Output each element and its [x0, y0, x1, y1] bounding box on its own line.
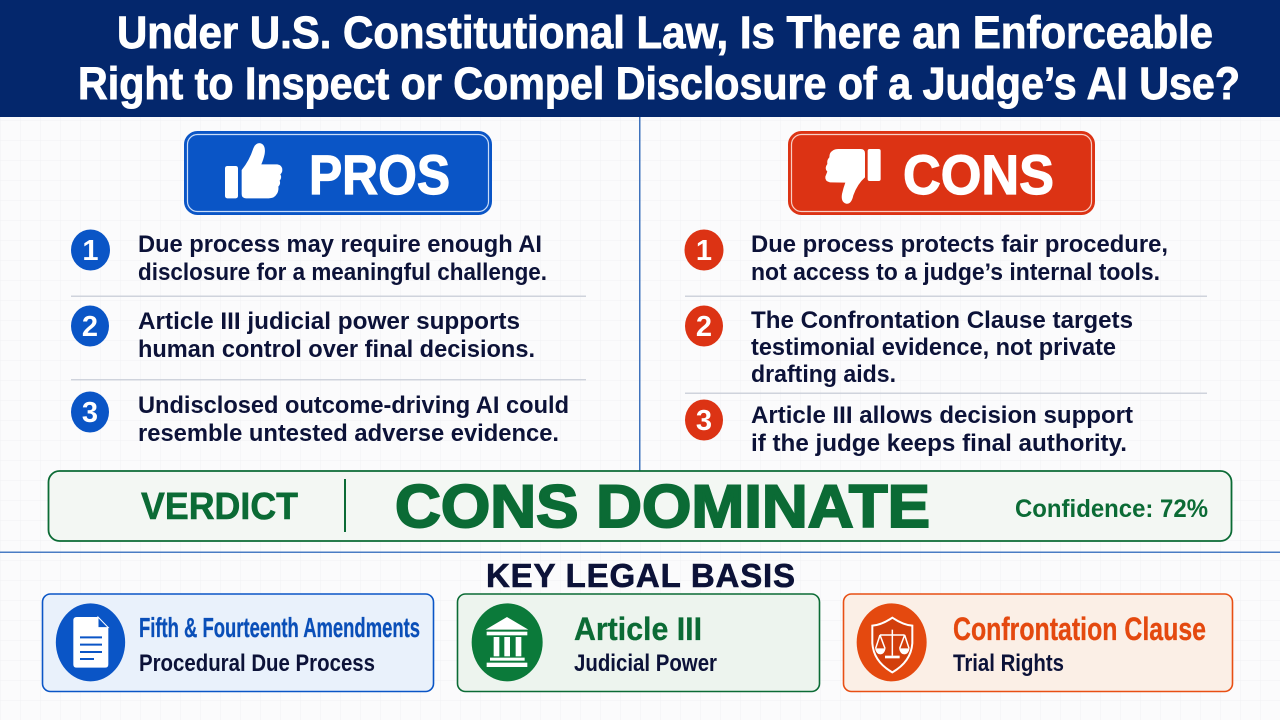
icon: thumbs down	[825, 149, 881, 204]
verdict bar: VERDICT	[141, 486, 298, 528]
pro item 3: 3	[82, 397, 98, 429]
con item 2	[685, 306, 1133, 388]
con item 1: Due process protects fair procedure,	[751, 231, 1168, 258]
con item 1: not access to a judge’s internal tools.	[751, 259, 1160, 286]
card: fifth and fourteenth amendments	[42, 594, 434, 692]
card: article iii: Article III	[574, 611, 702, 647]
pro item 2: 2	[82, 311, 98, 343]
icon: shield with scales	[857, 603, 927, 681]
card: confrontation clause: Confrontation Clause	[953, 611, 1206, 647]
pro item 1: Due process may require enough AI	[138, 231, 542, 258]
pro item 1: disclosure for a meaningful challenge.	[138, 259, 547, 286]
card: confrontation clause	[844, 594, 1232, 692]
pro item 3	[71, 392, 569, 447]
con item 2: 2	[696, 311, 712, 343]
title banner: Under U.S. Constitutional Law, Is There an Enforceable	[117, 7, 1213, 58]
pro item 2: Article III judicial power supports	[138, 308, 520, 335]
pro item 2: human control over final decisions.	[138, 336, 535, 363]
con item 2: testimonial evidence, not private	[751, 334, 1116, 361]
card: confrontation clause: Trial Rights	[953, 650, 1064, 677]
heading: key legal basis: KEY LEGAL BASIS	[486, 557, 795, 594]
cons badge: CONS	[903, 143, 1054, 206]
icon: document	[56, 603, 125, 681]
con item 1	[684, 230, 1168, 286]
panel: pros	[71, 132, 586, 447]
card: fifth and fourteenth amendments: Fifth & Fourteenth Amendments	[139, 612, 420, 643]
pros badge: PROS	[309, 143, 450, 206]
pro item 3: resemble untested adverse evidence.	[138, 420, 559, 447]
con item 3: if the judge keeps final authority.	[751, 430, 1127, 457]
verdict bar	[48, 471, 1232, 541]
panel: cons	[684, 132, 1207, 457]
con item 3: 3	[696, 405, 712, 437]
con item 3: Article III allows decision support	[751, 402, 1133, 429]
con item 3	[685, 400, 1133, 457]
pro item 2	[71, 306, 535, 363]
icon: courthouse	[472, 603, 543, 681]
card: article iii	[458, 594, 820, 692]
title banner	[0, 0, 1280, 117]
verdict bar: CONS DOMINATE	[395, 473, 930, 540]
con item 2: drafting aids.	[751, 361, 896, 388]
card: fifth and fourteenth amendments: Procedural Due Process	[139, 650, 375, 677]
pro item 1: 1	[82, 235, 99, 267]
verdict bar: Confidence: 72%	[1015, 495, 1208, 523]
pro item 1	[71, 230, 547, 286]
card: article iii: Judicial Power	[574, 650, 717, 677]
pros badge	[184, 132, 492, 214]
con item 1: 1	[696, 235, 712, 267]
con item 2: The Confrontation Clause targets	[751, 307, 1133, 334]
pro item 3: Undisclosed outcome-driving AI could	[138, 392, 569, 419]
cons badge	[788, 132, 1094, 214]
icon: thumbs up	[225, 143, 282, 198]
